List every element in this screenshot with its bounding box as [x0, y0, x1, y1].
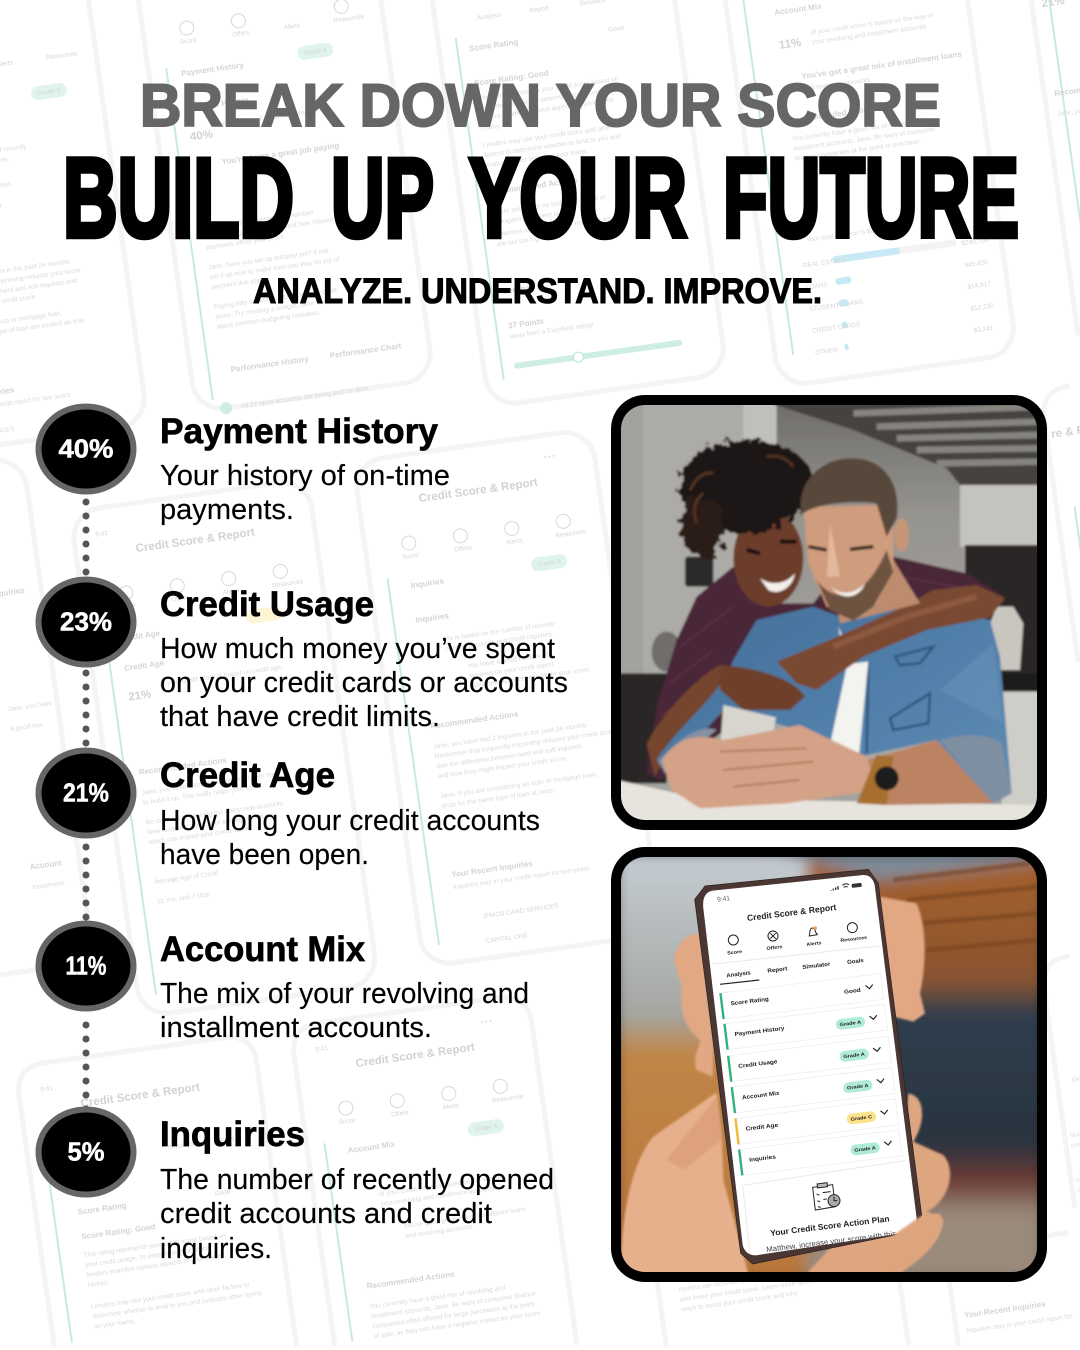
app title: Credit Score & Report: [746, 902, 837, 923]
background app screen mockups: 11%: [778, 37, 802, 52]
background app screen mockups: Credit Score & Report: [135, 527, 256, 555]
heading: account mix: Account Mix: [160, 930, 366, 969]
background app screen mockups: More new accounts can lower your score.: [470, 666, 592, 690]
badge 40%: [38, 406, 134, 492]
tabs: Goals: [847, 958, 864, 966]
background app screen mockups: lenders examine various aspects of your credit: [479, 97, 615, 123]
background app screen mockups: Account Mix: [347, 1140, 396, 1155]
background app screen mockups: • • •: [544, 453, 556, 461]
background app screen mockups: Jane, you have: [7, 700, 53, 713]
icon: clipboard checklist with clock: [813, 1183, 840, 1210]
background app screen mockups: 11 Yrs, and 7 Mos: [157, 891, 211, 906]
heading: payment history: Payment History: [160, 412, 439, 451]
background app screen mockups: Inquiries stay in your credit report for two years.: [453, 865, 591, 891]
background app screen mockups: STUDENT LOANS: [809, 299, 864, 313]
nav labels: Resources: [840, 935, 868, 943]
background app screen mockups: Resources: [272, 578, 304, 590]
background app screen mockups: Simulator: [167, 1141, 196, 1151]
background app screen mockups: factors to determine whether to lend to you and: [484, 133, 622, 159]
background app screen mockups: Resources: [333, 13, 365, 25]
background app screen mockups: Offers: [232, 29, 251, 39]
background app screen mockups: Your total balance is $274,678: [806, 225, 895, 244]
item: credit age 21%: [38, 750, 540, 871]
background app screen mockups: on your loans.: [93, 1318, 136, 1331]
background app screen mockups: are not too high: [496, 235, 543, 248]
background app screen mockups: Offers: [391, 1109, 410, 1119]
background app screen mockups: about common budgeting mistakes.: [216, 309, 320, 331]
phone body: [695, 869, 922, 1264]
row: credit age: Grade C: [850, 1114, 873, 1122]
background app screen mockups: You have a small number of: [467, 652, 549, 670]
background app screen mockups: Grade B: [37, 87, 62, 97]
background app screen mockups: months can increase your average credit age: [678, 1268, 810, 1294]
background app screen mockups: Recommended Actions: [789, 104, 879, 125]
background app screen mockups: Your Recent Inquiries: [964, 1299, 1047, 1320]
background app screen mockups: $3,241: [973, 325, 994, 335]
nav icons: [728, 923, 857, 945]
background app screen mockups: history.: [480, 123, 502, 132]
background app screen mockups: evaluate other terms on your loans.: [485, 148, 589, 169]
background app screen mockups: Your history of on-time payments.: [221, 107, 319, 128]
photo panel: hands holding phone with credit app: [611, 847, 1047, 1283]
background app screen mockups: your credit usage. To determine your score,: [85, 1245, 211, 1269]
background app screen mockups: Alerts: [442, 1102, 460, 1111]
background app screen mockups: lenders examine various aspects of your credit: [86, 1253, 222, 1279]
background app screen mockups: Jane, try to keep your credit card balances low.: [675, 1248, 813, 1274]
title line: break down your score: BREAK DOWN YOUR SCORE: [140, 72, 941, 139]
background app screen mockups: Payment History: [185, 95, 250, 113]
row: credit usage: Grade A: [843, 1051, 866, 1059]
background app screen mockups: companies often offered for large purchases at the point: [372, 1301, 535, 1330]
nav labels: Offers: [766, 944, 783, 951]
badge 5%: 5%: [68, 1136, 104, 1166]
heading: inquiries: Inquiries: [160, 1115, 305, 1154]
row: inquiries: Grade A: [854, 1145, 877, 1153]
background app screen mockups: Balances on transaction or revolving accounts: [495, 213, 630, 238]
badge 23%: [38, 580, 134, 664]
background app screen mockups: of your credit score is based on credit age.: [159, 664, 284, 688]
background app screen mockups: Score Rating: [77, 1201, 127, 1217]
background app screen mockups: Lenders may use your credit score and other: [482, 124, 614, 149]
background app screen mockups: 5% is based on the number of recently: [443, 620, 556, 643]
background app screen mockups: to build it up. This really helps your score.: [143, 783, 264, 807]
row: credit usage: Credit Usage: [738, 1059, 778, 1070]
nav labels: Score: [727, 949, 743, 956]
row: score rating: Score Rating: [730, 997, 770, 1007]
background app screen mockups: $14,917: [967, 281, 992, 291]
main headline: build up your future: YOUR: [469, 136, 687, 260]
background app screen mockups: LOANS: [806, 281, 829, 291]
background app screen mockups: Score: [179, 37, 197, 46]
description: inquiries: credit accounts and credit: [160, 1198, 492, 1230]
row: score rating: Good: [844, 988, 862, 996]
tabs: [713, 946, 879, 984]
background app screen mockups: Inquiries stay in your credit report for: [966, 1313, 1074, 1335]
background app screen mockups: payment due dates.: [211, 276, 269, 291]
background app screen mockups: Jane, you have a long credit history. Learn how: [141, 771, 279, 797]
background app screen mockups: Recommended Actions: [430, 709, 519, 731]
background app screen mockups: score. Try creating a budget, Jane. Learn: [215, 297, 335, 321]
badge 21%: [38, 750, 134, 836]
background app screen mockups: Grade A: [303, 47, 328, 57]
description: credit age: How long your credit accounts: [160, 805, 540, 837]
background app screen mockups: Your Recent Inquiries: [451, 859, 534, 879]
badge 21%: 21%: [63, 778, 109, 808]
background app screen mockups: Report: [529, 5, 550, 14]
background app screen mockups: and lower your credit score. Learn more about: [680, 1278, 814, 1303]
background app screen mockups: Good: [608, 25, 625, 34]
background app screen mockups: which can impact your credit score.: [147, 825, 251, 846]
background app screen mockups: You currently have a good mix of revolving and: [792, 117, 929, 143]
row: inquiries: [738, 1130, 902, 1175]
action plan card: Matthew, increase your score with this: [766, 1229, 897, 1254]
background app screen mockups: Average Age of Credit: [154, 870, 219, 886]
background app screen mockups: finance companies at the point of purchase.: [795, 138, 922, 163]
background app screen mockups: Grade A: [474, 1123, 499, 1133]
background app screen mockups: shop for the same type of loan at once.: [441, 787, 555, 810]
description: credit age: have been open.: [160, 839, 369, 871]
background app screen mockups: There are few or no instances of late or: [492, 194, 607, 217]
blurred photo backdrop: [613, 850, 1047, 1283]
item: inquiries 5%: [38, 1110, 554, 1265]
background app screen mockups: You've got a great mix of installment loans: [801, 50, 963, 81]
background app screen mockups: CREDIT CARDS: [812, 321, 861, 335]
badge 11%: 11%: [66, 950, 106, 980]
background app screen mockups: REAL ESTATE: [802, 257, 847, 270]
background app screen mockups: Payment History: [181, 60, 245, 78]
photo panel: couple looking at phone: [611, 395, 1047, 830]
background app screen mockups: Recommended Actions: [489, 175, 578, 197]
row: inquiries: Inquiries: [749, 1154, 776, 1164]
background app screen mockups: history.: [88, 1279, 109, 1289]
background app screen mockups: All 17 open accounts are being paid on time: [241, 385, 369, 410]
background app screen mockups: Credit Score & Report: [80, 1082, 201, 1110]
row: account mix: [731, 1068, 895, 1113]
background app screen mockups: Credit Score & Report: [355, 1042, 476, 1070]
background app screen mockups: Performance History: [230, 354, 310, 374]
background app screen mockups: $12,230: [970, 303, 995, 313]
main headline: build up your future: BUILD: [63, 136, 294, 260]
background app screen mockups: Inquiries: [415, 611, 450, 625]
tagline: ANALYZE. UNDERSTAND. IMPROVE.: [253, 272, 822, 311]
background app screen mockups: Good: [214, 1188, 231, 1197]
background app screen mockups: Inquiries: [410, 576, 445, 590]
background app screen mockups: Credit Score & Report: [418, 477, 539, 505]
background app screen mockups: $45,420: [964, 259, 989, 269]
background app screen mockups: This rating represents your credit score based on: [476, 76, 619, 103]
background app screen mockups: Many credit cards you have access to,: [673, 1236, 785, 1259]
tabs: Simulator: [802, 962, 832, 971]
background app screen mockups: of your credit score is based on the way of: [379, 1174, 502, 1198]
background app screen mockups: determine whether to lend to you and evaluate other terms: [92, 1290, 263, 1321]
heading: credit age: Credit Age: [160, 756, 335, 795]
background app screen mockups: Resources: [555, 528, 587, 540]
background app screen mockups: inquiries on your credit report.: [468, 661, 556, 680]
action plan card: Your Credit Score Action Plan: [770, 1213, 890, 1238]
background app screen mockups: Recommended Actions: [366, 1269, 456, 1291]
background app screen mockups: installment accounts, Jane. Be wary of consumer: [793, 126, 937, 153]
background app screen mockups: away from a Excellent rating!: [509, 322, 594, 340]
background app screen mockups: Be cautious of opening too many new accounts.: [146, 800, 285, 826]
background app screen mockups: 9:41: [95, 530, 109, 539]
background app screen mockups: 40%: [189, 128, 214, 144]
background app screen mockups: See the difference between hard and soft inquiries: [436, 743, 583, 770]
row: account mix: Account Mix: [742, 1091, 781, 1101]
background app screen mockups: of your credit score is based on the way of: [810, 12, 934, 36]
background app screen mockups: 37 Points: [508, 317, 545, 330]
background app screen mockups: and revolving accounts.: [405, 1223, 475, 1240]
hand behind phone: [622, 897, 950, 1273]
nav labels: Alerts: [806, 940, 822, 947]
row: payment history: Grade A: [839, 1019, 862, 1027]
background app screen mockups: installment: [32, 880, 65, 891]
background app screen mockups: your credit usage. To determine your score,: [477, 88, 604, 113]
row: account mix: Grade A: [847, 1083, 870, 1090]
background app screen mockups: Paying bills on time is vital to a good credit: [213, 287, 338, 311]
background app screen mockups: You're doing a great job paying: [221, 141, 340, 166]
badge 5%: [38, 1110, 134, 1194]
row: score rating: [719, 974, 884, 1019]
description: credit usage: on your credit cards or accounts: [160, 667, 568, 699]
description: payment history: Your history of on-time: [160, 460, 450, 492]
background app screen mockups: Account: [29, 858, 63, 872]
background app screen mockups: Credit Age: [120, 629, 161, 643]
description: payment history: payments.: [160, 494, 294, 526]
background app screen mockups: installment accounts, Jane. Be wary of consumer finance: [371, 1290, 537, 1320]
background app screen mockups: Credit Age: [124, 658, 165, 673]
background app screen mockups: Score Rating: Good: [81, 1222, 156, 1241]
row: payment history: Payment History: [734, 1026, 786, 1038]
background app screen mockups: meeting on-time payments to maintain: [202, 209, 314, 232]
row: credit usage: [727, 1036, 891, 1082]
background app screen mockups: Remember that frequently improving reduces your credit score.: [434, 728, 618, 760]
background app screen mockups: If making a purchase on credit, time every few: [677, 1258, 811, 1284]
background app screen mockups: JPMCB CARD SERVICES: [482, 903, 560, 920]
background app screen mockups: Offers: [454, 544, 473, 554]
background app screen mockups: ways to boost your credit score and why: [680, 1290, 799, 1314]
background app screen mockups: Jane, if you are considering an auto or mortgage loan,: [440, 771, 598, 800]
tabs: Report: [767, 966, 788, 975]
item: account mix 11%: [38, 924, 529, 1044]
background app screen mockups: a good mix: [10, 721, 44, 733]
background app screen mockups: You currently have a good mix of revolving and: [369, 1285, 506, 1311]
background app screen mockups: Jane, have you set up autopay yet? If not,: [208, 247, 330, 271]
background app screen mockups: Account Mix: [774, 2, 823, 17]
background app screen mockups: New accounts lower your average credit age,: [147, 811, 279, 836]
background app screen mockups: 21%: [128, 689, 152, 704]
description: account mix: installment accounts.: [160, 1012, 432, 1044]
background app screen mockups: Jane, you have had 2 inquiries in the past 24 months.: [433, 722, 589, 751]
badge 11%: [38, 924, 134, 1008]
background app screen mockups: Alerts: [505, 537, 523, 546]
background app screen mockups: your revolving and installment accounts.: [811, 23, 929, 46]
background app screen mockups: Goals: [217, 1135, 235, 1145]
background app screen mockups: Score: [401, 552, 419, 561]
main headline: build up your future: [63, 136, 1019, 260]
background app screen mockups: Recommended Actions: [138, 756, 228, 777]
row: credit age: Credit Age: [745, 1123, 779, 1133]
background app screen mockups: Score: [118, 602, 136, 611]
row: payment history: [723, 1004, 888, 1050]
background app screen mockups: and revolving accounts.: [803, 76, 873, 93]
background app screen mockups: and how they might impact your credit score.: [437, 755, 568, 780]
description: account mix: The mix of your revolving and: [160, 978, 529, 1010]
background app screen mockups: of sale, as they can have a negative impact on your score.: [373, 1310, 543, 1340]
background app screen mockups: Offers: [171, 594, 190, 604]
description: inquiries: inquiries.: [160, 1233, 272, 1265]
background app screen mockups: Score Rating: Good: [474, 68, 549, 88]
background app screen mockups: CAPITAL ONE: [486, 932, 529, 945]
background app screen mockups: 9:41: [315, 1045, 329, 1054]
row: credit age: [734, 1099, 899, 1144]
action plan card: [743, 1161, 905, 1254]
thumb in front of phone: [889, 1212, 942, 1272]
background app screen mockups: • • •: [481, 1018, 493, 1026]
background app screen mockups: 9:41: [40, 1085, 54, 1094]
background app screen mockups: Analysis: [477, 11, 502, 22]
badge 23%: 23%: [60, 606, 112, 636]
phone screen: [703, 875, 917, 1255]
background app screen mockups: Resources: [492, 1093, 524, 1105]
background app screen mockups: Resources: [46, 50, 78, 62]
item: payment history 40%: [38, 406, 450, 526]
description: credit usage: that have credit limits.: [160, 701, 440, 733]
description: inquiries: The number of recently opened: [160, 1164, 554, 1196]
background app screen mockups: opened accounts and credit inquiries.: [445, 631, 554, 653]
background app screen mockups: Performance Chart: [329, 341, 402, 360]
main headline: build up your future: UP: [331, 136, 434, 260]
background app screen mockups: Grade B: [537, 558, 562, 568]
background app screen mockups: Alerts: [283, 22, 301, 31]
background app screen mockups: derogatory payment status: [493, 209, 572, 226]
background app screen mockups: Alerts: [222, 587, 240, 596]
background app screen mockups: This rating represents your credit score based on: [83, 1232, 227, 1259]
background app screen mockups: Lenders may use your credit score and other factors to: [91, 1281, 250, 1311]
badge 40%: 40%: [58, 434, 114, 464]
heading: credit usage: Credit Usage: [160, 585, 374, 624]
background app screen mockups: You've got a great mix of installment loans: [403, 1206, 527, 1230]
background app screen mockups: your revolving and installment accounts.: [380, 1185, 497, 1208]
description: credit usage: How much money you’ve spent: [160, 633, 555, 665]
status bar: 9:41: [717, 895, 731, 904]
nav labels: [727, 926, 868, 956]
timeline connector dots: [82, 498, 90, 1112]
background app screen mockups: Score: [338, 1117, 356, 1126]
background app screen mockups: history rating. Learn more about how missed: [204, 217, 334, 242]
background app screen mockups: set it up now to make sure you stay on top of: [209, 256, 340, 281]
tabs: Analysis: [726, 970, 751, 979]
background app screen mockups: Journey: [503, 282, 535, 296]
item: credit usage 23%: [38, 580, 568, 733]
background app screen mockups: payments affect your score.: [205, 233, 286, 252]
background app screen mockups: Score Rating: [469, 37, 519, 53]
background app screen mockups: $240,700: [961, 237, 989, 247]
background app screen mockups: OTHER: [815, 347, 839, 357]
